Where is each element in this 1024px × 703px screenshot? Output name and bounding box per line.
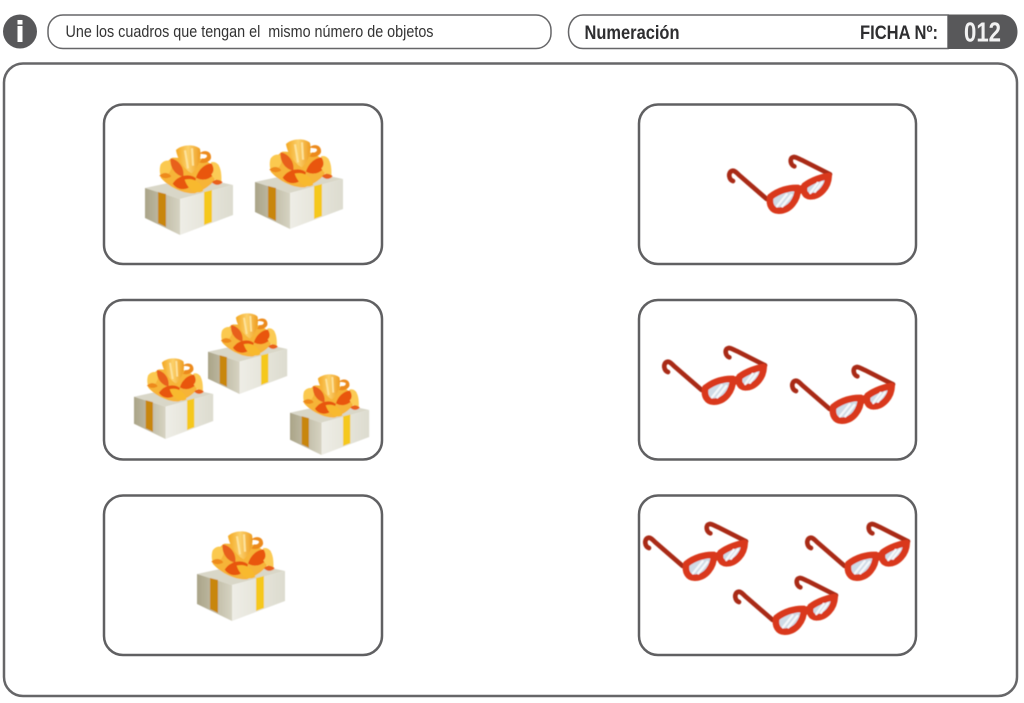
instruction text: Une los cuadros que tengan el mismo número de objetos bbox=[66, 23, 434, 41]
icon: gift bbox=[145, 145, 233, 235]
icon: gift bbox=[290, 374, 369, 455]
icon: info bbox=[3, 14, 37, 48]
instruction bar bbox=[48, 15, 551, 48]
icon: glasses bbox=[729, 157, 830, 211]
icon: glasses bbox=[664, 348, 765, 402]
card: two gifts bbox=[104, 104, 382, 264]
icon: glasses bbox=[645, 524, 746, 578]
icon: glasses bbox=[735, 578, 836, 632]
sheet number: 012 bbox=[964, 16, 1001, 48]
card: three pairs of glasses bbox=[639, 496, 916, 655]
icon: glasses bbox=[807, 524, 908, 578]
subject title: Numeración bbox=[584, 22, 680, 44]
icon: gift bbox=[208, 313, 287, 394]
icon: gift bbox=[134, 358, 213, 439]
icon: glasses bbox=[792, 367, 893, 421]
worksheet header bar bbox=[568, 14, 1018, 49]
icon: gift bbox=[255, 139, 343, 229]
card: one gift bbox=[104, 496, 382, 655]
card: three gifts bbox=[104, 300, 382, 460]
icon: gift bbox=[197, 531, 285, 621]
card: two pairs of glasses bbox=[639, 300, 916, 460]
card: one pair of glasses bbox=[639, 104, 916, 264]
sheet label: FICHA Nº: bbox=[860, 22, 938, 44]
